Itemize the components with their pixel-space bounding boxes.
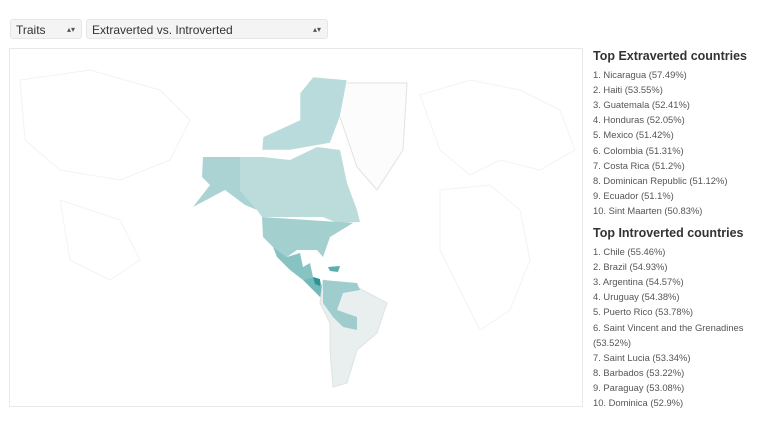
list: top extraverted: 10. Sint Maarten (50.83%) [593,205,702,216]
dropdown: dimension: Extraverted vs. Introverted [92,23,233,37]
list: top introverted: 9. Paraguay (53.08%) [593,382,684,393]
list: top extraverted: 3. Guatemala (52.41%) [593,99,690,110]
list: top introverted: 4. Uruguay (54.38%) [593,291,680,302]
map: South America [320,280,387,387]
map: NW South America [323,280,360,330]
list: top introverted: 1. Chile (55.46%) [593,246,665,257]
list: top extraverted: 9. Ecuador (51.1%) [593,190,674,201]
list: top introverted: 10. Dominica (52.9%) [593,397,683,408]
list: top introverted [593,226,744,408]
list: top extraverted: 5. Mexico (51.42%) [593,129,674,140]
list: top extraverted: Top Extraverted countries [593,49,747,63]
map: USA [262,217,353,257]
map: Canada [240,147,360,223]
dropdown: dimension [86,19,328,39]
list: top extraverted [593,49,747,216]
list: top extraverted: 7. Costa Rica (51.2%) [593,160,685,171]
list: top extraverted: 2. Haiti (53.55%) [593,84,663,95]
map: Nicaragua [313,277,320,286]
list: top introverted: 3. Argentina (54.57%) [593,276,684,287]
dropdown: traits: ▴▾ [67,25,75,34]
list: top introverted: 7. Saint Lucia (53.34%) [593,352,690,363]
list: top introverted: 5. Puerto Rico (53.78%) [593,306,693,317]
list: top extraverted: 1. Nicaragua (57.49%) [593,69,687,80]
list: top introverted: 6. Saint Vincent and the Grenadines [593,322,743,333]
list: top extraverted: 4. Honduras (52.05%) [593,114,685,125]
list: top extraverted: 8. Dominican Republic (51.12%) [593,175,727,186]
list: top introverted: 2. Brazil (54.93%) [593,261,668,272]
list: top introverted: Top Introverted countries [593,226,743,240]
list: top introverted: (53.52%) [593,337,631,348]
dropdown: traits [10,19,82,39]
map: Central America [303,277,330,300]
map: Greenland outline [333,83,407,190]
panel: map [9,48,583,407]
dropdown: dimension: ▴▾ [313,25,321,34]
dropdown: traits: Traits [16,23,46,37]
list: top introverted: 8. Barbados (53.22%) [593,367,684,378]
map: Mexico [273,247,313,280]
list: top extraverted: 6. Colombia (51.31%) [593,145,684,156]
map: Alaska [193,157,257,210]
map: Caribbean [328,266,340,272]
map: Arctic islands [262,77,347,150]
